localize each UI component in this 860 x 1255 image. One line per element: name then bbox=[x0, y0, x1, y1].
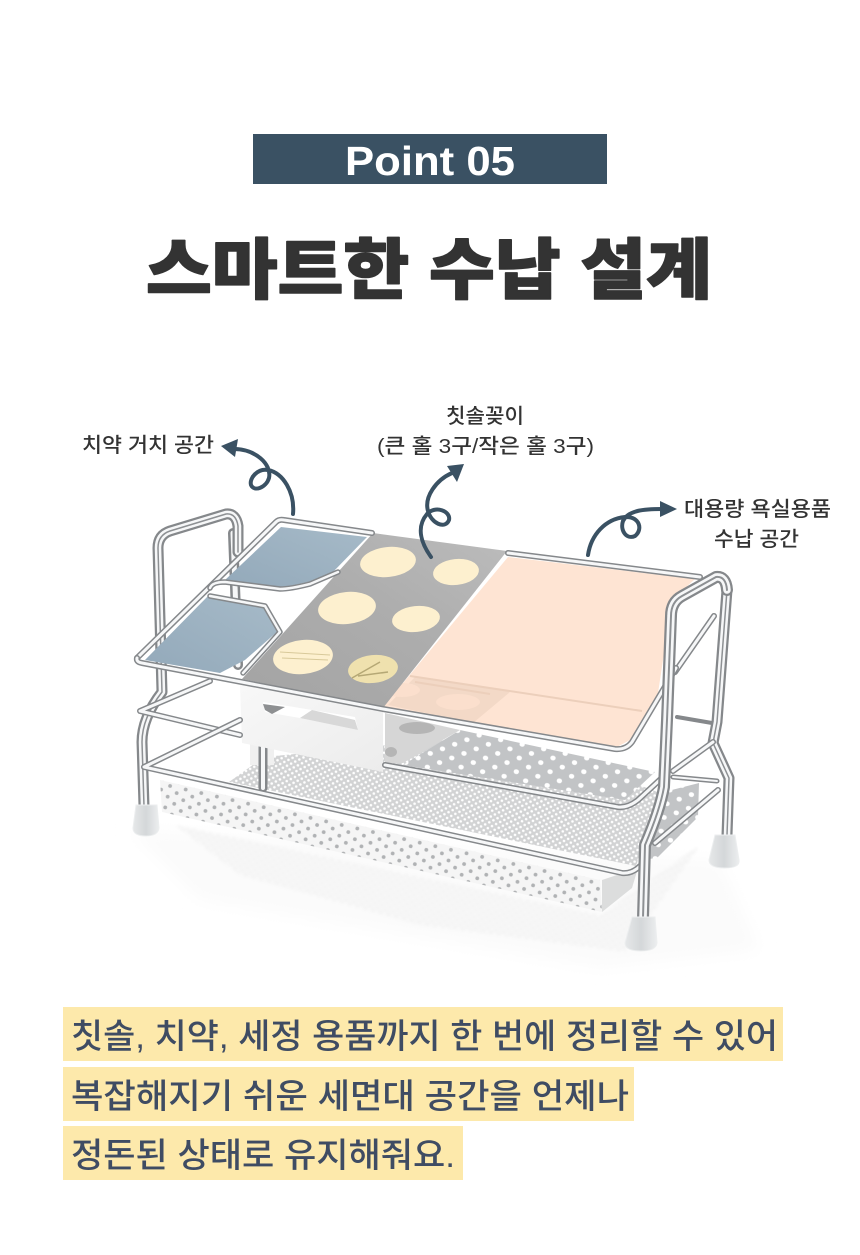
top frame rails bbox=[137, 520, 700, 749]
description highlighted text bbox=[63, 1007, 783, 1180]
highlight line 2 bbox=[63, 1067, 634, 1121]
back right post and leg bbox=[713, 590, 729, 835]
upper basket perforated bbox=[403, 730, 655, 800]
peach panel: storage space bbox=[383, 557, 695, 747]
gray panel: toothbrush holder top bbox=[242, 533, 507, 708]
label: toothpaste holder space: 치약 거치 공간 bbox=[82, 434, 214, 457]
white plate: toothbrush holder front bbox=[240, 685, 383, 772]
right front handle and leg bbox=[643, 577, 727, 918]
soft floor shadow bbox=[130, 825, 760, 968]
label: toothbrush holder: (큰 홀 3구/작은 홀 3구) bbox=[377, 435, 594, 458]
label: toothbrush holder bbox=[377, 405, 594, 458]
title: 스마트한 수납 설계 bbox=[146, 233, 712, 307]
label: large capacity bath storage: 수납 공간 bbox=[714, 528, 799, 551]
foot: back left bbox=[133, 805, 159, 836]
arrow: to bath storage bbox=[588, 501, 677, 555]
product: stainless steel rack bbox=[130, 514, 760, 968]
middle rail bbox=[140, 681, 664, 807]
label: large capacity bath storage: 대용량 욕실용품 bbox=[684, 498, 831, 521]
badge: Point 05 bbox=[253, 134, 607, 184]
lower rail bbox=[144, 720, 640, 873]
tray right end bbox=[602, 868, 638, 912]
highlight line 2: 복잡해지기 쉬운 세면대 공간을 언제나 bbox=[71, 1078, 629, 1116]
badge: Point 05: Point 05 bbox=[345, 138, 515, 184]
center support post bbox=[250, 743, 274, 788]
highlight line 3: 정돈된 상태로 유지해줘요. bbox=[71, 1137, 455, 1175]
arrow: to toothbrush holder bbox=[421, 464, 464, 557]
back posts bbox=[233, 533, 717, 781]
highlight line 1: 칫솔, 치약, 세정 용품까지 한 번에 정리할 수 있어 bbox=[71, 1018, 778, 1056]
arrow: to toothpaste holder bbox=[221, 439, 293, 514]
foot: front right bbox=[625, 917, 657, 951]
highlight line 1 bbox=[63, 1007, 783, 1061]
struts right bbox=[655, 616, 718, 843]
lower gray plate bbox=[385, 713, 460, 763]
tray front wall perforated bbox=[160, 780, 602, 912]
blue panel: upper toothpaste shelf bbox=[225, 527, 367, 588]
label: large capacity bath storage bbox=[684, 498, 831, 551]
blue panel: lower toothpaste shelf bbox=[145, 596, 277, 673]
highlight line 3 bbox=[63, 1126, 463, 1180]
tray floor perforated bbox=[229, 740, 660, 866]
foot: back right bbox=[709, 835, 739, 868]
label: toothbrush holder: 칫솔꽂이 bbox=[446, 405, 524, 428]
left handle and post bbox=[142, 514, 238, 806]
holes: toothbrush slots bbox=[271, 544, 480, 686]
tray right wall perforated bbox=[640, 783, 699, 860]
